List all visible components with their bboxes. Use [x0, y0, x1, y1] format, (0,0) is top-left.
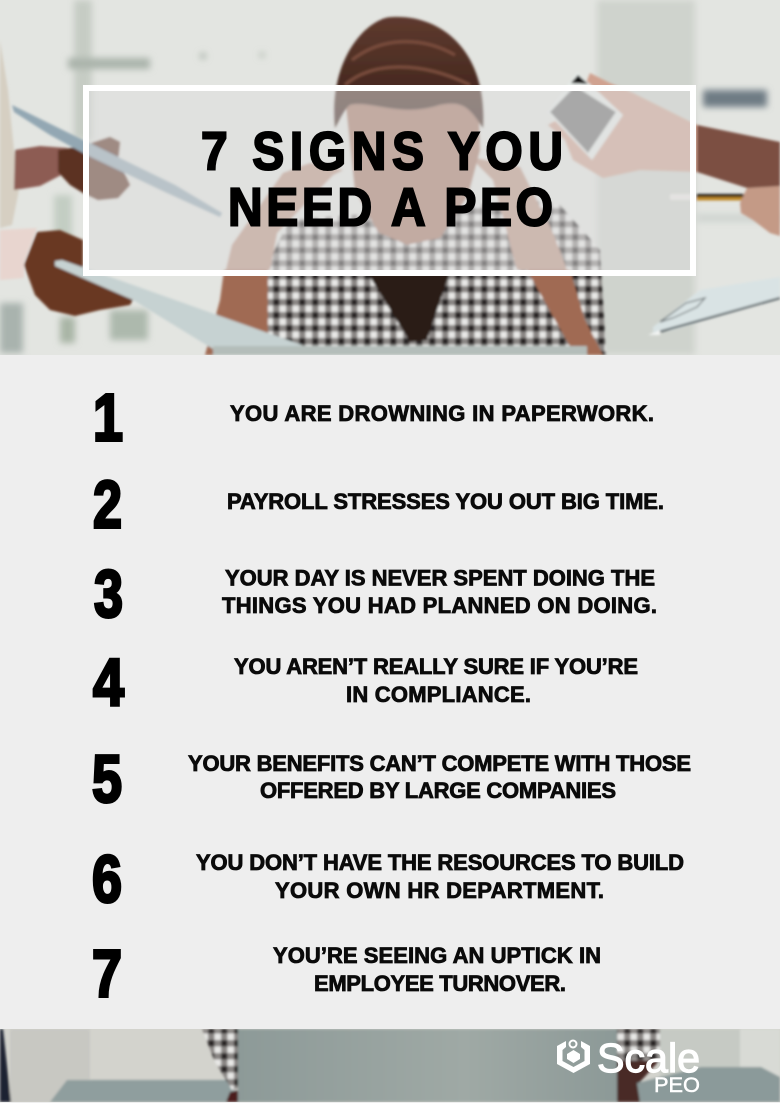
list of seven signs [92, 380, 691, 1012]
sign 4: IN COMPLIANCE. [346, 682, 531, 707]
sign 5: OFFERED BY LARGE COMPANIES [260, 778, 616, 803]
lower left hand [24, 230, 134, 316]
logo wordmark: PEO [654, 1074, 700, 1097]
sign 1: YOU ARE DROWNING IN PAPERWORK. [230, 401, 654, 426]
sign 3 [94, 557, 657, 632]
sign 2: 2 [93, 468, 122, 542]
upper left hand [58, 137, 130, 200]
right arm [697, 125, 780, 190]
sign 4 [93, 646, 638, 720]
title box [86, 88, 693, 273]
header photo: stressed man surrounded by hands [0, 0, 780, 355]
sign 6 [92, 842, 684, 917]
open shirt neck [367, 272, 450, 342]
lower left tablet [55, 260, 302, 349]
right papers [653, 277, 780, 333]
title text: NEED A PEO [228, 177, 553, 237]
man's lower forearms [205, 270, 270, 355]
logo: Scale PEO [557, 1035, 700, 1097]
sign 7 [92, 936, 601, 1012]
sign 7: YOU’RE SEEING AN UPTICK IN [273, 943, 601, 968]
sign 4: 4 [93, 646, 124, 720]
sign 6: YOUR OWN HR DEPARTMENT. [275, 878, 604, 903]
lower right hand [740, 186, 780, 236]
left person torso [0, 40, 20, 228]
translucent title panel [86, 88, 693, 273]
sign 6: 6 [92, 842, 122, 917]
sign 3: 3 [94, 557, 123, 632]
sign 3: YOUR DAY IS NEVER SPENT DOING THE [225, 566, 655, 590]
upper left tablet [12, 105, 222, 217]
sign 5: 5 [92, 742, 122, 817]
logo wordmark: Scale [597, 1035, 700, 1081]
man's head [345, 95, 480, 245]
pencil [696, 194, 773, 197]
sign 5 [92, 742, 691, 817]
title text [201, 121, 563, 237]
icon: shield logo [557, 1040, 590, 1073]
upper left arm [14, 146, 67, 190]
sign 7: 7 [92, 936, 122, 1012]
phone [555, 74, 624, 160]
sign 7: EMPLOYEE TURNOVER. [314, 971, 566, 996]
laptop edge [213, 346, 587, 355]
sign 1 [93, 380, 654, 456]
sign 4: YOU AREN’T REALLY SURE IF YOU’RE [234, 654, 638, 679]
glasses on papers [660, 298, 705, 322]
man's hands at temples [226, 163, 343, 270]
footer photo: laptop and desk [0, 1029, 780, 1102]
sign 2 [93, 468, 664, 542]
sign 6: YOU DON’T HAVE THE RESOURCES TO BUILD [196, 850, 684, 875]
phone hand [548, 73, 697, 178]
title text: 7 SIGNS YOU [201, 121, 563, 181]
sign 5: YOUR BENEFITS CAN’T COMPETE WITH THOSE [188, 751, 691, 776]
lower left sleeve [0, 228, 37, 280]
sign 3: THINGS YOU HAD PLANNED ON DOING. [222, 593, 657, 618]
sign 1: 1 [93, 380, 123, 456]
man's shirt [268, 200, 606, 355]
sign 2: PAYROLL STRESSES YOU OUT BIG TIME. [227, 489, 664, 514]
